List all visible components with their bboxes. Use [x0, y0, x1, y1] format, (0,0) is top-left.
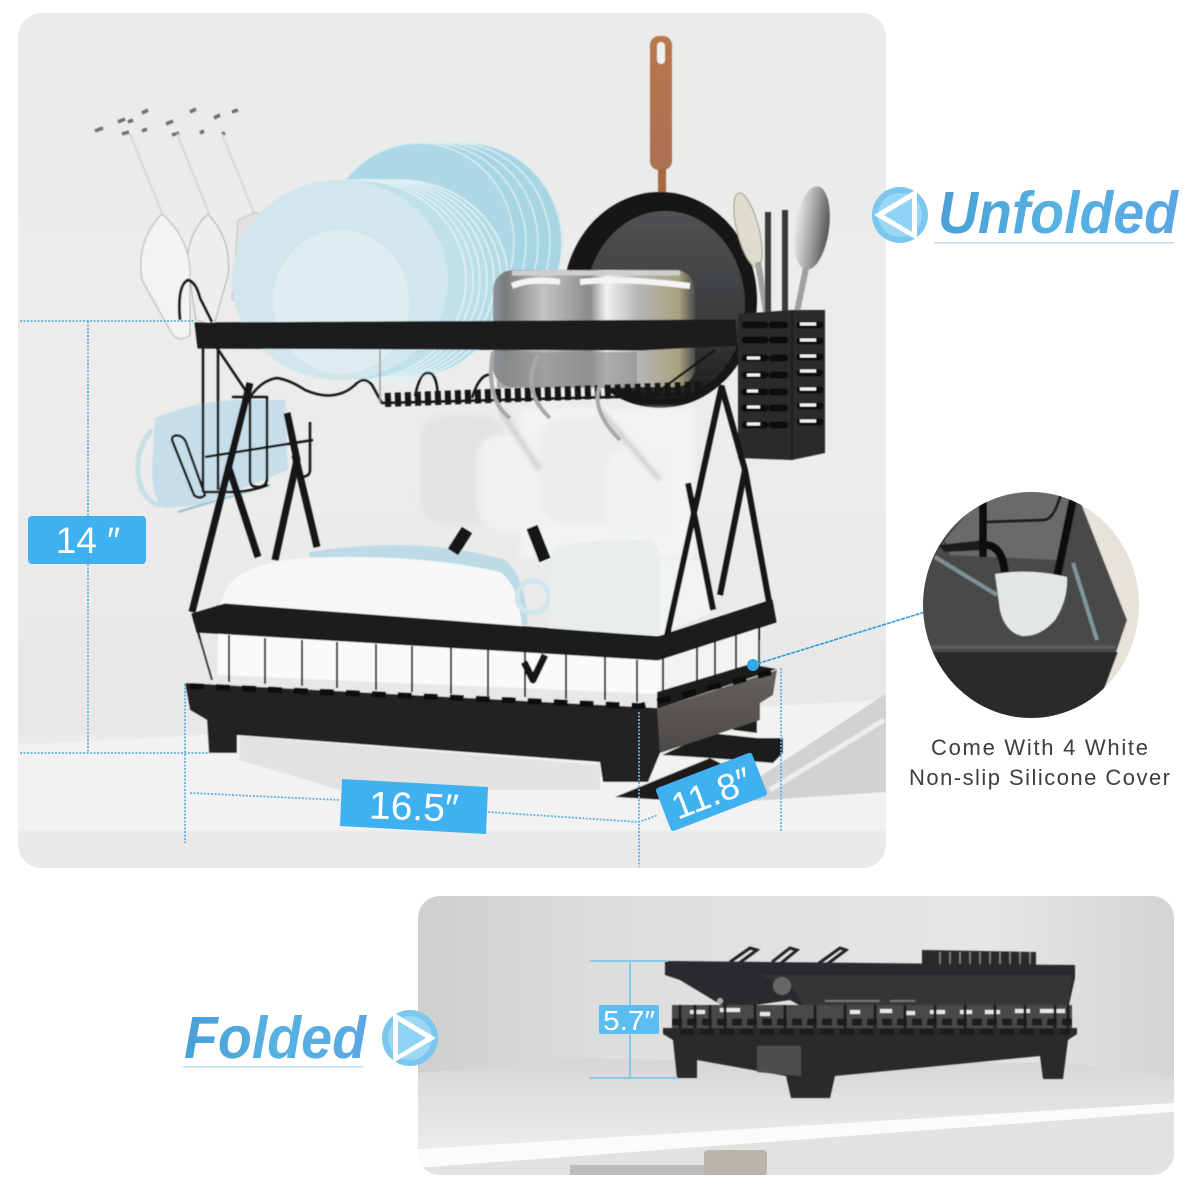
label: width 16.5 inches [340, 779, 488, 834]
heading: unfolded: Unfolded [938, 180, 1180, 246]
caption: silicone cover: Non-slip Silicone Cover [909, 765, 1170, 790]
cutlery holder [738, 310, 825, 460]
callout dot on tray corner [747, 659, 759, 671]
cutlery [728, 184, 835, 312]
dimension lines folded [590, 961, 678, 1078]
icon: left arrow badge [872, 187, 928, 243]
blue mug on left [138, 400, 288, 512]
left hanger rack [179, 280, 212, 322]
top loops and back holder [730, 948, 846, 968]
panel: folded rack photo [418, 896, 1174, 1176]
caption: silicone cover: Come With 4 White [931, 735, 1148, 760]
upper tier rim [195, 320, 737, 350]
label: width 16.5 inches: 16.5″ [368, 784, 460, 831]
caption: silicone cover [909, 735, 1170, 790]
shelf [418, 1059, 1174, 1176]
drain tray base [185, 664, 783, 800]
inset: silicone cover detail [923, 492, 1139, 718]
label: height 14 inches: 14 ″ [56, 520, 120, 561]
frying pan [563, 36, 757, 408]
heading: folded: Folded [184, 1005, 368, 1071]
lower wire basket [198, 625, 759, 702]
label: depth 11.8 inches: 11.8″ [666, 760, 757, 827]
upper wire basket [215, 345, 715, 403]
label: height 14 inches [28, 516, 146, 564]
steel pots [493, 270, 695, 388]
lower tier rim [192, 600, 776, 660]
stacked blue plates [232, 143, 562, 380]
dimension lines main [20, 321, 781, 867]
glass mugs [420, 408, 695, 558]
black rack frame [172, 280, 776, 702]
label: depth 11.8 inches [655, 752, 768, 832]
white bowls and cups on lower tier [213, 540, 760, 694]
centre hooks [491, 352, 620, 440]
right folding legs [665, 385, 722, 645]
leader line to silicone cover inset [753, 612, 925, 665]
wire section [672, 1005, 1072, 1029]
panel: unfolded rack photo [18, 13, 886, 868]
folded rack [663, 948, 1077, 1098]
counter surface [18, 640, 886, 868]
label: folded height 5.7 inches: 5.7″ [603, 1005, 655, 1036]
tray [663, 1028, 1077, 1098]
upper folded tier [665, 961, 1075, 1009]
left folding legs [192, 383, 250, 612]
hanging wine glasses [95, 109, 266, 339]
icon: right arrow badge [382, 1010, 438, 1066]
